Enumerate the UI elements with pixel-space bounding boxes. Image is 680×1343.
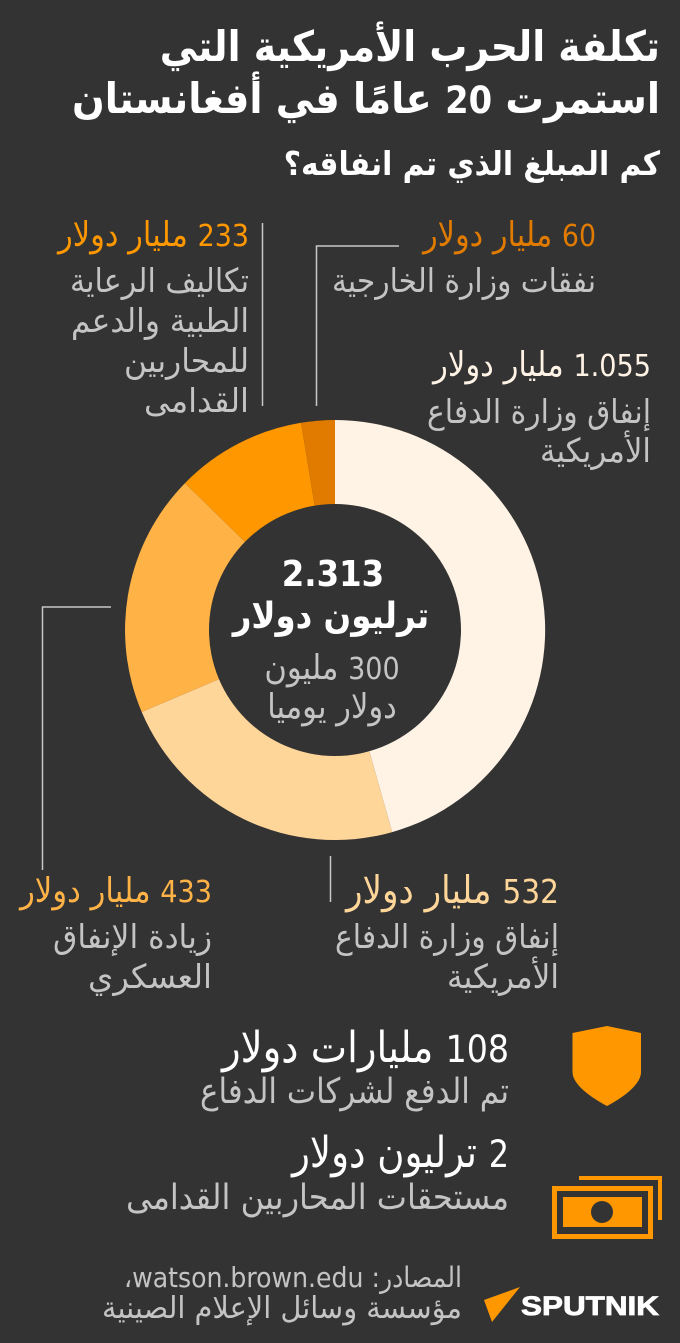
- label: 532: [335, 868, 559, 996]
- icon: shield: [572, 1026, 641, 1106]
- label: 532: الأمريكية: [447, 956, 559, 996]
- label: 1055: الأمريكية: [540, 430, 651, 470]
- source: المصادر: watson.brown.edu،: [124, 1261, 462, 1294]
- donut hole: [209, 504, 461, 756]
- label: 233: القدامى: [144, 381, 249, 420]
- stat: veterans: [126, 1128, 509, 1218]
- label: 433: 433 مليار دولار: [18, 871, 212, 911]
- label: 1055: إنفاق وزارة الدفاع: [427, 392, 651, 432]
- leader line: 233: [262, 223, 264, 406]
- segment: 1055: [335, 420, 545, 832]
- leader line: 433: [42, 607, 111, 870]
- label: 433: [18, 871, 212, 996]
- label: 433: العسكري: [88, 957, 212, 996]
- leader line: 532: [330, 856, 332, 902]
- donut chart: [125, 420, 545, 840]
- title: تكلفة الحرب الأمريكية التي: [160, 21, 660, 72]
- icon: money: [554, 1178, 660, 1236]
- source: مؤسسة وسائل الإعلام الصينية: [102, 1291, 462, 1326]
- label: 233: 233 مليار دولار: [56, 215, 249, 255]
- label: 532: 532 مليار دولار: [344, 868, 559, 913]
- segment: 233: [185, 423, 335, 630]
- logo: sputnik: SPUTNIK: [521, 1291, 660, 1321]
- center total: ترليون دولار: [231, 596, 429, 637]
- center total: [231, 554, 429, 727]
- label: 1055: [427, 345, 651, 470]
- stat: defense companies: 108 مليارات دولار: [220, 1023, 509, 1073]
- title: [72, 21, 660, 124]
- center total: 2.313: [282, 554, 384, 595]
- label: 60: نفقات وزارة الخارجية: [332, 261, 596, 300]
- label: 1055: 1.055 مليار دولار: [431, 345, 651, 385]
- segment: 433: [125, 483, 335, 712]
- center total: 300 مليون: [264, 648, 400, 688]
- label: 60: [332, 215, 596, 300]
- label: 233: الطبية والدعم: [71, 301, 249, 340]
- stat: defense companies: تم الدفع لشركات الدفاع: [200, 1072, 509, 1112]
- label: 233: [56, 215, 249, 420]
- label: 233: للمحاربين: [124, 341, 249, 380]
- label: 433: زيادة الإنفاق: [53, 917, 212, 956]
- segment: 532: [142, 630, 392, 840]
- subtitle: كم المبلغ الذي تم انفاقه؟: [284, 144, 661, 184]
- center total: دولار يوميا: [267, 687, 397, 727]
- source: [102, 1261, 462, 1326]
- stat: defense companies: [200, 1023, 509, 1112]
- stat: veterans: مستحقات المحاربين القدامى: [126, 1178, 509, 1218]
- logo: sputnik: [484, 1287, 660, 1322]
- stat: veterans: 2 ترليون دولار: [290, 1128, 509, 1178]
- label: 532: إنفاق وزارة الدفاع: [335, 917, 559, 957]
- leader line: 60: [316, 246, 399, 406]
- label: 233: تكاليف الرعاية: [70, 261, 249, 300]
- segment: 60: [301, 420, 335, 630]
- label: 60: 60 مليار دولار: [421, 215, 596, 255]
- title: استمرت 20 عامًا في أفغانستان: [72, 71, 660, 124]
